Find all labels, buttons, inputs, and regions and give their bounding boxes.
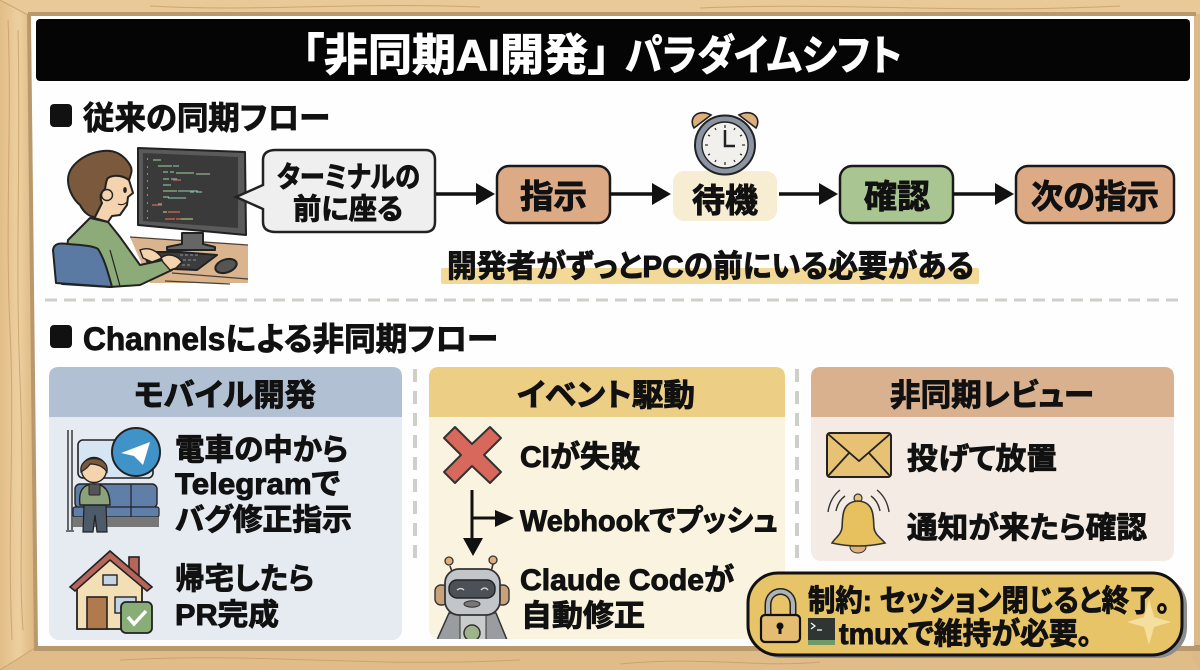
panel header: 非同期レビュー [890, 378, 1094, 413]
text: PR done at home [175, 563, 314, 632]
step: confirm [840, 166, 953, 223]
text: CI failed: CIが失敗 [520, 440, 640, 474]
text: Claude Code auto-fix: Claude Codeが [520, 563, 734, 597]
panel header [811, 367, 1174, 417]
speech bubble: sit at terminal: 前に座る [293, 193, 403, 226]
icon: envelope [827, 433, 891, 477]
icon: alarm clock [692, 113, 758, 174]
panel: event driven [429, 367, 785, 641]
divider [795, 369, 799, 560]
icon: house with check [70, 551, 152, 633]
text: session ends on close: 制約: セッション閉じると終了。 [808, 585, 1170, 618]
title text: 「非同期AI開発」 [302, 31, 610, 80]
icon: sparkle [1127, 599, 1171, 645]
step: confirm: 確認 [864, 178, 930, 215]
step: instruction [497, 166, 610, 223]
icon: robot [435, 556, 509, 641]
step: next instruction: 次の指示 [1031, 178, 1159, 215]
speech bubble: sit at terminal [236, 150, 435, 232]
arrow [779, 183, 838, 205]
panel header [49, 367, 402, 417]
text: fix bugs from the train [175, 434, 352, 537]
icon: bell [828, 490, 889, 553]
arrow [436, 183, 495, 205]
divider [413, 369, 417, 560]
panel header [429, 367, 785, 417]
panel: async review [811, 367, 1174, 561]
text: tmux required: tmuxで維持が必要。 [839, 617, 1092, 651]
panel header: イベント駆動 [517, 378, 695, 413]
text: fix bugs from the train: バグ修正指示 [175, 504, 352, 537]
title text: パラダイムシフト [625, 32, 902, 79]
step: instruction: 指示 [520, 178, 587, 215]
step: waiting: 待機 [692, 182, 758, 219]
speech bubble: sit at terminal: ターミナルの [277, 161, 420, 194]
arrows: webhook push and flow down [463, 490, 514, 556]
text: webhook push: Webhookでプッシュ [520, 505, 778, 538]
callout: constraint [748, 573, 1187, 658]
title bar [36, 19, 1190, 81]
icon: person on train with Telegram [66, 428, 160, 532]
text: check on notification: 通知が来たら確認 [907, 511, 1147, 545]
panel: mobile development [49, 367, 402, 640]
highlighted note: 開発者がずっとPCの前にいる必要がある [447, 249, 974, 284]
panel header: モバイル開発 [134, 378, 316, 413]
icon: padlock [761, 592, 800, 642]
illustration: developer at terminal [53, 148, 248, 287]
title text [302, 31, 902, 80]
step: next instruction [1016, 166, 1174, 223]
text: fix bugs from the train: 電車の中から [175, 434, 348, 467]
heading: asynchronous flow: Channelsによる非同期フロー [83, 321, 498, 357]
text: Claude Code auto-fix [520, 563, 734, 633]
text: fix bugs from the train: Telegramで [175, 468, 340, 501]
text: send and leave: 投げて放置 [907, 443, 1057, 476]
arrow [953, 183, 1014, 205]
text: PR done at home: PR完成 [175, 599, 279, 632]
text: PR done at home: 帰宅したら [175, 563, 314, 596]
icon: terminal [808, 618, 835, 645]
heading: synchronous flow: 従来の同期フロー [83, 100, 330, 136]
icon: red cross [444, 427, 501, 483]
text: Claude Code auto-fix: 自動修正 [521, 600, 645, 633]
step: waiting [673, 171, 777, 221]
arrow [610, 183, 671, 205]
